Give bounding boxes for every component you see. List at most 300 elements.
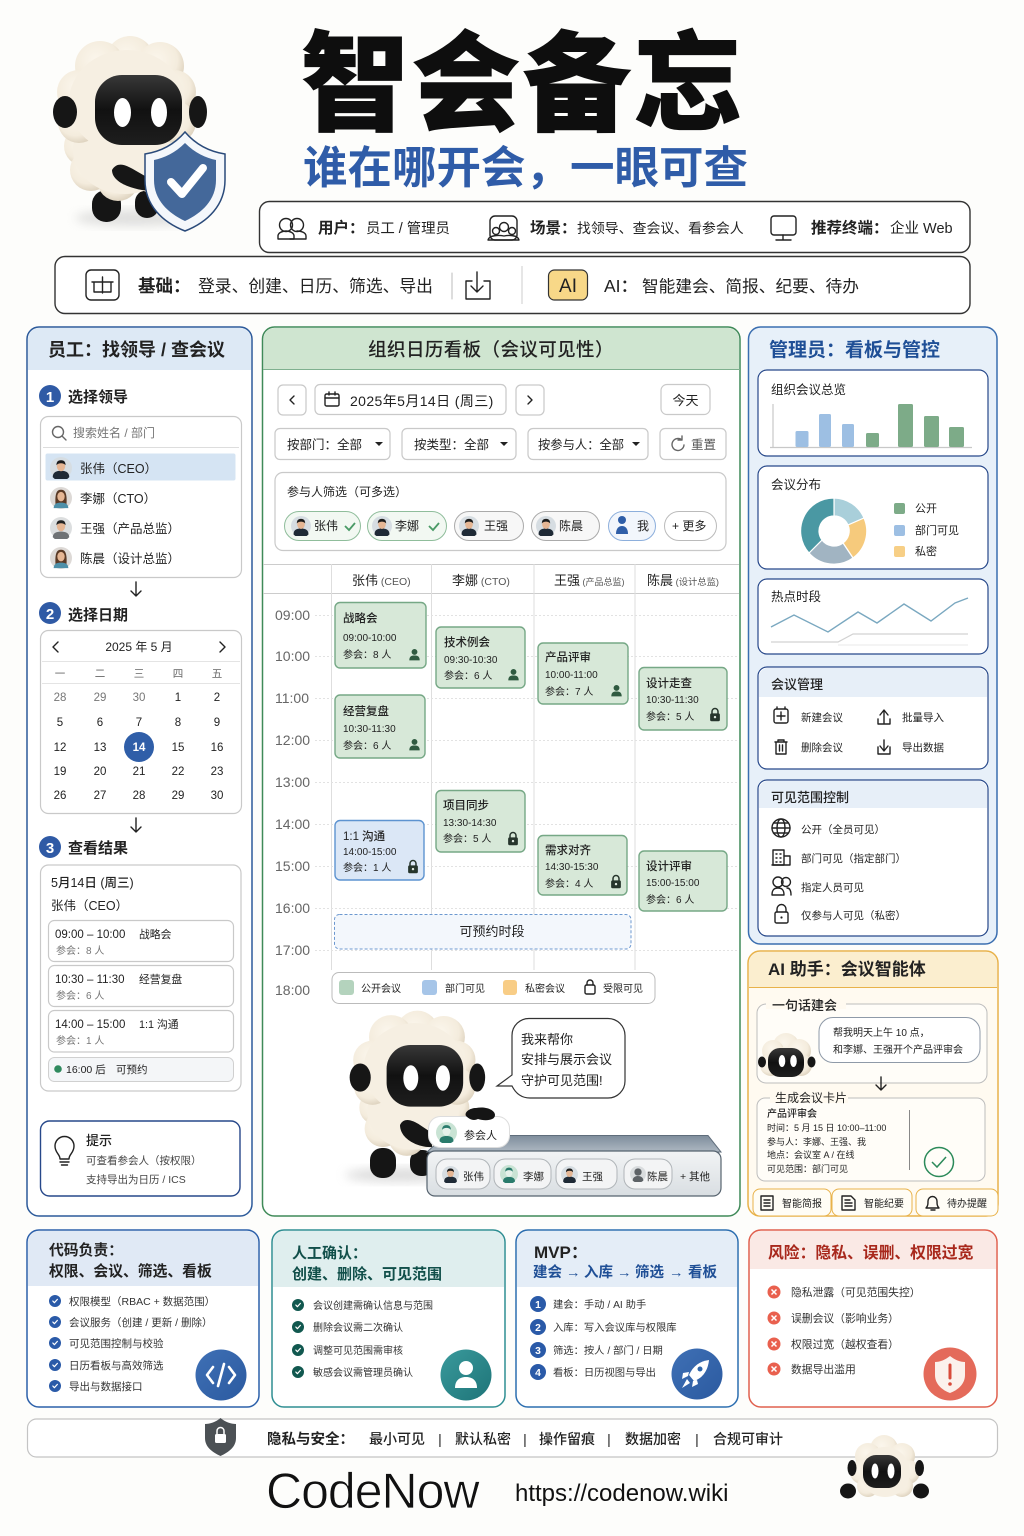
meeting: 设计评审: 设计评审 bbox=[646, 859, 692, 873]
mini calendar: 9 bbox=[214, 717, 220, 729]
mini calendar: 2025 年 5 月 bbox=[105, 640, 173, 654]
card: meeting distribution donut bbox=[758, 466, 988, 569]
icon: export bbox=[452, 272, 490, 299]
list: 筛选：按人 / 部门 / 日期 bbox=[553, 1344, 663, 1357]
button: brief bbox=[753, 1189, 831, 1216]
mini calendar: 22 bbox=[172, 766, 184, 778]
leader row: 李娜 bbox=[50, 487, 156, 509]
list bbox=[530, 1296, 677, 1380]
meeting card: 战略会: 战略会 bbox=[139, 927, 172, 941]
meeting card: 1:1 沟通: 14:00 – 15:00 bbox=[55, 1019, 125, 1031]
meeting: 技术例会: 参会：6 人 bbox=[444, 669, 492, 682]
meeting: 项目同步 bbox=[436, 790, 525, 852]
mini calendar: 29 bbox=[172, 790, 184, 802]
tip box: 支持导出为日历 / ICS bbox=[86, 1173, 186, 1186]
mini calendar: 一 bbox=[55, 668, 66, 680]
heading: 创建、删除、可见范围 bbox=[292, 1265, 442, 1283]
attendee chip: 参会人 bbox=[464, 1128, 497, 1142]
meeting: 技术例会: 技术例会 bbox=[444, 635, 490, 649]
list bbox=[768, 1285, 921, 1376]
button: brief: 智能简报 bbox=[782, 1197, 822, 1210]
mascot: sheep with attendee tray bbox=[345, 1011, 721, 1196]
list: 入库：写入会议库与权限库 bbox=[553, 1321, 677, 1334]
legend: 公开会议 bbox=[361, 982, 401, 995]
meeting card: 1:1 沟通: 1:1 沟通 bbox=[139, 1018, 179, 1031]
mascot: small sheep bbox=[758, 1033, 816, 1077]
chip: more bbox=[664, 512, 716, 540]
meeting: 1:1 沟通 bbox=[335, 820, 424, 880]
legend bbox=[332, 972, 655, 1004]
meeting: 项目同步: 项目同步 bbox=[443, 798, 489, 812]
heading: AI assistant: AI 助手：会议智能体 bbox=[768, 959, 926, 979]
text: terminal: 推荐终端： bbox=[811, 219, 889, 237]
heading bbox=[49, 1242, 212, 1280]
action: export bbox=[878, 740, 944, 754]
action: delete bbox=[775, 740, 843, 754]
meeting card: 1:1 沟通 bbox=[48, 1010, 234, 1052]
meeting card: 经营复盘: 经营复盘 bbox=[139, 972, 182, 986]
speech bubble: 我来帮你 bbox=[521, 1032, 573, 1047]
list: 权限模型（RBAC + 数据范围） bbox=[69, 1295, 215, 1308]
time axis: 09:00 bbox=[275, 607, 310, 623]
text: basics: 登录、创建、日历、筛选、导出 bbox=[198, 277, 433, 296]
mini calendar: 13 bbox=[94, 742, 106, 754]
icon: rocket bbox=[672, 1348, 722, 1400]
mini calendar: 12 bbox=[54, 742, 66, 754]
mini calendar: 三 bbox=[134, 668, 144, 680]
meeting: 设计走查 bbox=[639, 668, 727, 730]
speech bubble: 守护可见范围! bbox=[521, 1073, 603, 1088]
list: 2 bbox=[535, 1323, 541, 1334]
user prompt bubble: 和李娜、王强开个产品评审会 bbox=[833, 1043, 963, 1056]
list: 日历看板与高效筛选 bbox=[69, 1359, 164, 1372]
panel: code ownership bbox=[27, 1230, 259, 1407]
list: 权限过宽（越权查看） bbox=[791, 1337, 899, 1351]
meeting: 战略会: 战略会 bbox=[343, 611, 378, 625]
legend: 私密会议 bbox=[525, 982, 565, 995]
mini calendar: 20 bbox=[94, 766, 106, 778]
speech bubble bbox=[497, 1018, 625, 1098]
panel: human confirm bbox=[272, 1230, 505, 1407]
date toolbar bbox=[278, 384, 710, 415]
list: 1 bbox=[535, 1300, 541, 1311]
mini calendar: 14 bbox=[133, 742, 146, 754]
date toolbar: 2025年5月14日 (周三) bbox=[350, 393, 494, 409]
heading: admin: 管理员：看板与管控 bbox=[769, 338, 940, 361]
mini calendar: 二 bbox=[95, 668, 105, 680]
heading: 人工确认： bbox=[292, 1245, 367, 1262]
meeting: 需求对齐: 14:30-15:30 bbox=[545, 862, 599, 873]
panel: admin bbox=[748, 327, 997, 944]
text: privacy items bbox=[267, 1430, 783, 1448]
mini calendar: 28 bbox=[133, 790, 145, 802]
meeting: 项目同步: 参会：5 人 bbox=[443, 832, 491, 845]
group: generated meeting card: 时间：5 月 15 日 10:00–11:00 bbox=[767, 1122, 886, 1133]
meeting: 1:1 沟通: 14:00-15:00 bbox=[343, 847, 397, 858]
option: department bbox=[772, 850, 906, 865]
option: private bbox=[775, 904, 906, 923]
list: 可见范围控制与校验 bbox=[69, 1337, 164, 1350]
icon: person bbox=[440, 1350, 492, 1400]
tray chip: 张伟 bbox=[436, 1159, 490, 1189]
heading: board: 组织日历看板（会议可见性） bbox=[368, 339, 614, 360]
meeting card: 经营复盘: 参会：6 人 bbox=[56, 989, 104, 1002]
action: import bbox=[878, 710, 944, 724]
meeting card: 战略会: 09:00 – 10:00 bbox=[55, 929, 125, 941]
meeting: 产品评审: 参会：7 人 bbox=[545, 685, 593, 698]
card: hot time line chart: 热点时段 bbox=[771, 589, 821, 604]
card: visibility control: 可见范围控制 bbox=[771, 790, 849, 805]
text: privacy items: 数据加密 bbox=[625, 1431, 681, 1447]
option: designated: 指定人员可见 bbox=[801, 881, 864, 894]
result list: 5月14日 (周三) bbox=[51, 876, 134, 890]
card: overview bar chart: 组织会议总览 bbox=[771, 382, 846, 397]
list: 调整可见范围需审核 bbox=[313, 1344, 403, 1357]
text: privacy items: | bbox=[607, 1431, 611, 1447]
leader search list: 搜索姓名 / 部门 bbox=[73, 425, 155, 440]
tip box: 提示 bbox=[86, 1133, 112, 1148]
icon: check circle bbox=[924, 1148, 954, 1176]
meeting: 产品评审 bbox=[538, 643, 628, 704]
button: reminder: 待办提醒 bbox=[947, 1197, 987, 1210]
mini calendar: 7 bbox=[136, 717, 142, 729]
icon: search bbox=[52, 426, 66, 440]
meeting: 项目同步: 13:30-14:30 bbox=[443, 818, 497, 829]
mini calendar: 15 bbox=[172, 742, 184, 754]
text: AI features: AI： bbox=[604, 276, 638, 296]
column headers: 张伟 (CEO) bbox=[352, 573, 411, 588]
meeting: 设计走查: 设计走查 bbox=[646, 676, 692, 690]
meeting: 经营复盘: 经营复盘 bbox=[343, 704, 389, 718]
button: reminder bbox=[916, 1189, 998, 1216]
text: terminal: 企业 Web bbox=[890, 219, 953, 237]
meeting: 战略会 bbox=[335, 602, 426, 668]
leader search list bbox=[40, 416, 242, 578]
chip: 王强 bbox=[454, 512, 524, 540]
legend: 受限可见 bbox=[603, 983, 643, 995]
icon: bulb bbox=[55, 1136, 74, 1165]
chip: 李娜 bbox=[368, 512, 446, 540]
logo: CodeNow: CodeNow bbox=[266, 1463, 480, 1519]
group: generated meeting card: 生成会议卡片 bbox=[775, 1091, 847, 1105]
heading: → bbox=[669, 1265, 684, 1281]
list: 导出与数据接口 bbox=[69, 1380, 142, 1393]
mini calendar: 27 bbox=[94, 790, 106, 802]
meeting: 设计走查: 参会：5 人 bbox=[646, 710, 694, 723]
tip box: 可查看参会人（按权限） bbox=[86, 1154, 202, 1167]
option: designated bbox=[772, 877, 864, 895]
card: meeting management: 会议管理 bbox=[771, 677, 823, 692]
step 3 heading: 查看结果 bbox=[68, 839, 128, 857]
time axis bbox=[275, 607, 310, 998]
meeting: 战略会: 09:00-10:00 bbox=[343, 633, 397, 644]
text: privacy items: 隐私与安全： bbox=[267, 1430, 354, 1448]
mini calendar: 30 bbox=[211, 790, 223, 802]
participant filter bbox=[275, 472, 726, 550]
meeting: 设计评审: 参会：6 人 bbox=[646, 893, 694, 906]
group: generated meeting card: 地点：会议室 A / 在线 bbox=[767, 1149, 855, 1160]
list: 误删会议（影响业务） bbox=[791, 1312, 899, 1325]
column headers bbox=[352, 573, 719, 588]
leader row: 李娜: 李娜（CTO） bbox=[80, 491, 156, 506]
title: 智会备忘 bbox=[301, 24, 745, 145]
chip: 张伟: 张伟 bbox=[314, 519, 338, 533]
mini calendar: 8 bbox=[175, 717, 181, 729]
meeting: 设计评审 bbox=[639, 851, 727, 911]
time axis: 16:00 bbox=[275, 900, 310, 916]
text: privacy items: 默认私密 bbox=[455, 1431, 511, 1447]
action: new: 新建会议 bbox=[801, 711, 843, 724]
heading: → bbox=[617, 1265, 632, 1281]
date toolbar: 今天 bbox=[672, 393, 699, 408]
meeting card: 1:1 沟通: 参会：1 人 bbox=[56, 1034, 104, 1047]
group: generated meeting card: 参与人：李娜、王强、我 bbox=[767, 1136, 866, 1147]
mini calendar: 30 bbox=[133, 692, 145, 704]
option: public: 公开（全员可见） bbox=[801, 823, 885, 836]
available slot bbox=[48, 1058, 234, 1082]
group: generated meeting card: 产品评审会 bbox=[767, 1107, 817, 1120]
arrow bbox=[131, 818, 141, 832]
heading: 代码负责： bbox=[49, 1242, 123, 1259]
text: privacy items: | bbox=[695, 1431, 699, 1447]
mini calendar: 6 bbox=[97, 717, 103, 729]
mini calendar: 1 bbox=[175, 692, 181, 704]
action: delete: 删除会议 bbox=[801, 741, 843, 754]
icon: monitor bbox=[771, 216, 796, 240]
privacy bar bbox=[28, 1418, 998, 1457]
icon: shield bbox=[145, 132, 225, 231]
time axis: 12:00 bbox=[275, 732, 310, 748]
leader row: 陈晨: 陈晨（设计总监） bbox=[80, 551, 180, 566]
mini calendar: 26 bbox=[54, 790, 66, 802]
list bbox=[49, 1295, 215, 1393]
meeting: 战略会: 参会：8 人 bbox=[343, 648, 391, 661]
list: 建会：手动 / AI 助手 bbox=[553, 1298, 646, 1311]
option: department: 部门可见（指定部门） bbox=[801, 852, 906, 865]
action: export: 导出数据 bbox=[902, 741, 944, 754]
heading bbox=[292, 1245, 442, 1283]
chip: more: + 更多 bbox=[672, 519, 706, 533]
mascot: footer sheep bbox=[840, 1435, 929, 1498]
panel: organisation calendar board bbox=[262, 327, 740, 1216]
action: new bbox=[774, 707, 843, 724]
mini calendar: 5 bbox=[57, 717, 63, 729]
time axis: 10:00 bbox=[275, 648, 310, 664]
time axis: 11:00 bbox=[275, 690, 309, 706]
meeting: 技术例会: 09:30-10:30 bbox=[444, 655, 498, 666]
card: visibility control bbox=[758, 780, 988, 936]
meeting card: 经营复盘: 10:30 – 11:30 bbox=[55, 974, 124, 986]
meeting: 技术例会 bbox=[436, 627, 525, 688]
list: 3 bbox=[535, 1346, 541, 1357]
text: AI features: 智能建会、简报、纪要、待办 bbox=[642, 277, 859, 296]
arrow bbox=[131, 582, 141, 596]
text: scenarios: 找领导、查会议、看参会人 bbox=[577, 220, 744, 236]
attendee chip bbox=[428, 1107, 510, 1148]
available slot band bbox=[334, 914, 631, 949]
text: privacy items: | bbox=[438, 1431, 442, 1447]
speech bubble: 安排与展示会议 bbox=[521, 1052, 612, 1067]
available slot: 可预约 bbox=[116, 1063, 148, 1076]
meeting: 产品评审: 产品评审 bbox=[545, 650, 591, 664]
option: private: 仅参与人可见（私密） bbox=[801, 909, 906, 922]
column headers: 王强 (产品总监) bbox=[554, 573, 625, 588]
icon: calendar bbox=[86, 270, 119, 300]
time axis: 13:00 bbox=[275, 774, 310, 790]
panel: MVP bbox=[516, 1230, 738, 1407]
tray chip: 李娜 bbox=[494, 1159, 551, 1189]
tray chip: 王强: 王强 bbox=[582, 1171, 603, 1183]
filter row: 按部门：全部 bbox=[287, 437, 362, 452]
leader row: 王强 bbox=[50, 517, 180, 541]
list: 删除会议需二次确认 bbox=[313, 1321, 403, 1334]
available slot: 16:00 后 bbox=[66, 1064, 106, 1076]
chip: 陈晨 bbox=[532, 512, 600, 540]
result list: 张伟（CEO） bbox=[51, 898, 128, 913]
tip box bbox=[40, 1121, 240, 1196]
arrow bbox=[876, 1077, 886, 1090]
text: privacy items: | bbox=[523, 1431, 527, 1447]
icon: AI badge: AI bbox=[559, 276, 577, 297]
legend: 部门可见 bbox=[445, 982, 485, 995]
button: minutes: 智能纪要 bbox=[864, 1197, 904, 1210]
mascot: sheep with shield bbox=[53, 36, 225, 231]
step 2 heading: 选择日期 bbox=[68, 606, 128, 624]
leader row: 王强: 王强（产品总监） bbox=[80, 522, 180, 536]
step 3 heading bbox=[39, 836, 128, 858]
mini calendar: 19 bbox=[54, 766, 66, 778]
step 2 heading bbox=[39, 602, 128, 624]
calendar grid bbox=[263, 564, 739, 998]
attendee tray bbox=[427, 1136, 721, 1196]
meeting: 需求对齐: 参会：4 人 bbox=[545, 877, 593, 890]
bars bbox=[796, 404, 964, 447]
icon: lock shield bbox=[205, 1418, 236, 1456]
meeting: 1:1 沟通: 1:1 沟通 bbox=[343, 829, 386, 843]
heading: → bbox=[566, 1265, 580, 1281]
heading: MVP： bbox=[534, 1243, 588, 1262]
column headers: 陈晨 (设计总监) bbox=[647, 573, 719, 588]
heading: employee: 员工：找领导 / 查会议 bbox=[48, 340, 225, 360]
icon: code bbox=[196, 1350, 246, 1400]
list: 数据导出滥用 bbox=[791, 1362, 856, 1376]
mini calendar: 29 bbox=[94, 692, 106, 704]
step 1 heading: 选择领导 bbox=[68, 388, 128, 406]
time axis: 14:00 bbox=[275, 816, 310, 832]
step 2 heading: 2 bbox=[46, 606, 54, 623]
card: meeting distribution donut: 私密 bbox=[915, 544, 937, 558]
card: hot time line chart bbox=[758, 579, 988, 654]
time axis: 17:00 bbox=[275, 942, 310, 958]
heading: 看板 bbox=[688, 1263, 717, 1281]
step 3 heading: 3 bbox=[46, 840, 54, 857]
chip: 陈晨: 陈晨 bbox=[559, 518, 583, 533]
heading: 权限、会议、筛选、看板 bbox=[49, 1262, 212, 1280]
mini calendar: 23 bbox=[211, 766, 223, 778]
step 1 heading: 1 bbox=[46, 389, 54, 406]
tray chip: 李娜: 李娜 bbox=[523, 1170, 544, 1183]
text: users: 用户： bbox=[318, 218, 365, 237]
icon: scene bbox=[488, 216, 519, 240]
card: meeting distribution donut: 部门可见 bbox=[915, 523, 959, 537]
mini calendar: 五 bbox=[212, 668, 222, 680]
leader row: 张伟: 张伟（CEO） bbox=[80, 461, 157, 476]
tray chip: 陈晨: 陈晨 bbox=[647, 1170, 668, 1183]
meeting card: 战略会: 参会：8 人 bbox=[56, 944, 104, 957]
leader row: 张伟 bbox=[50, 457, 157, 481]
user prompt bubble bbox=[819, 1018, 980, 1062]
chip: 我 bbox=[608, 512, 656, 540]
user prompt bubble: 帮我明天上午 10 点， bbox=[833, 1026, 930, 1039]
donut chart bbox=[801, 498, 867, 564]
list: 隐私泄露（可见范围失控） bbox=[791, 1285, 921, 1299]
filter row bbox=[275, 428, 726, 460]
icon: warning shield bbox=[924, 1348, 976, 1400]
attendee tray: + 其他 bbox=[680, 1170, 711, 1183]
filter row: 按类型：全部 bbox=[414, 437, 489, 452]
list: 看板：日历视图与导出 bbox=[553, 1366, 656, 1379]
mini calendar: 28 bbox=[54, 692, 66, 704]
panel: employee bbox=[27, 327, 252, 1216]
mini calendar: 2 bbox=[214, 692, 220, 704]
option: public bbox=[772, 819, 885, 837]
group: generated meeting card bbox=[757, 1091, 985, 1181]
meeting: 1:1 沟通: 参会：1 人 bbox=[343, 861, 391, 874]
heading: 建会 bbox=[533, 1263, 562, 1281]
mini calendar: 四 bbox=[173, 668, 183, 680]
card: meeting distribution donut: 公开 bbox=[915, 503, 937, 515]
meeting card: 战略会 bbox=[48, 920, 234, 962]
heading: 筛选 bbox=[635, 1263, 664, 1281]
column headers: 李娜 (CTO) bbox=[452, 573, 510, 588]
group: one sentence meeting bbox=[757, 998, 987, 1083]
action: import: 批量导入 bbox=[902, 711, 944, 724]
text: users: 员工 / 管理员 bbox=[366, 220, 450, 237]
panel: AI assistant bbox=[748, 951, 998, 1216]
meeting: 设计评审: 15:00-15:00 bbox=[646, 878, 700, 889]
info bar: users, scenarios, terminal bbox=[260, 202, 970, 252]
list: 敏感会议需管理员确认 bbox=[313, 1366, 413, 1379]
tray chip: 张伟: 张伟 bbox=[463, 1170, 484, 1183]
group: generated meeting card: 可见范围：部门可见 bbox=[767, 1163, 848, 1174]
list: 会议服务（创建 / 更新 / 删除） bbox=[69, 1316, 213, 1329]
meeting: 经营复盘: 参会：6 人 bbox=[343, 739, 391, 752]
subtitle: 谁在哪开会，一眼可查 bbox=[303, 144, 748, 193]
meeting: 产品评审: 10:00-11:00 bbox=[545, 670, 598, 681]
heading: 入库 bbox=[584, 1263, 613, 1281]
icon: AI badge bbox=[548, 270, 588, 300]
tray chip: 王强 bbox=[556, 1159, 617, 1189]
chip: 我: 我 bbox=[637, 519, 649, 533]
button: minutes bbox=[832, 1189, 912, 1216]
mini calendar: 16 bbox=[211, 742, 223, 754]
text: scenarios: 场景： bbox=[530, 219, 577, 237]
icon: users bbox=[278, 218, 306, 239]
chip: 李娜: 李娜 bbox=[395, 518, 419, 533]
time axis: 18:00 bbox=[275, 982, 310, 998]
chip: 张伟 bbox=[284, 512, 360, 540]
card: meeting distribution donut: 会议分布 bbox=[771, 478, 821, 492]
heading: 风险：隐私、误删、权限过宽 bbox=[768, 1243, 974, 1262]
url: https://codenow.wiki bbox=[515, 1480, 728, 1507]
meeting: 需求对齐 bbox=[538, 836, 627, 895]
tray chip: 陈晨 bbox=[624, 1159, 672, 1189]
available slot band: 可预约时段 bbox=[459, 924, 525, 939]
heading bbox=[533, 1243, 717, 1281]
meeting: 经营复盘: 10:30-11:30 bbox=[343, 724, 396, 735]
panel: risks bbox=[749, 1230, 997, 1407]
group: one sentence meeting: 一句话建会 bbox=[772, 998, 837, 1013]
